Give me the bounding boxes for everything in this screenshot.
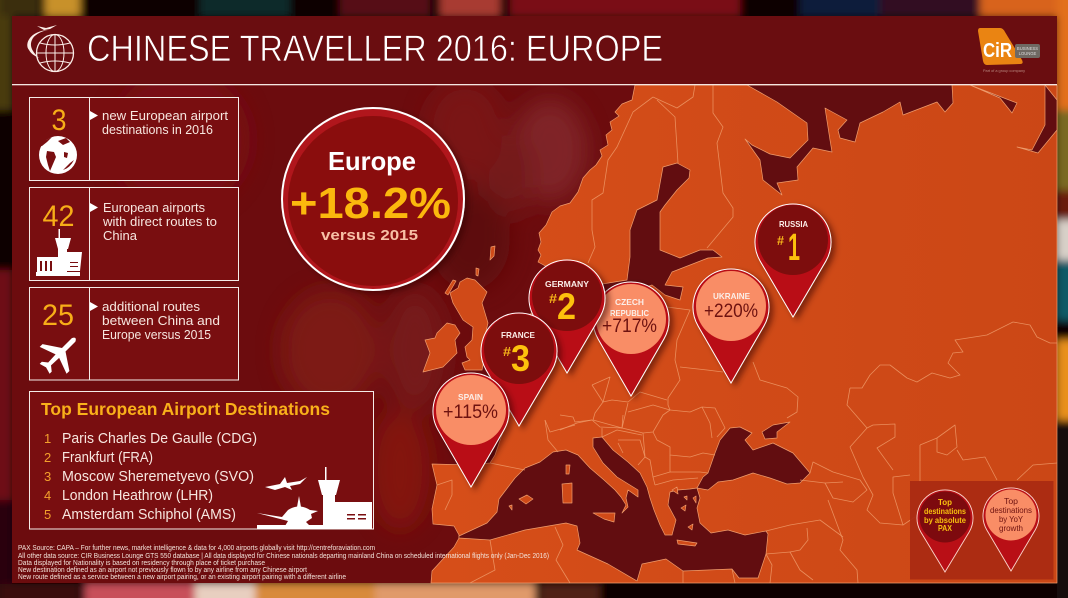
Barents and White Sea (745, 85, 953, 195)
pin: France #3: # (503, 344, 512, 359)
icon: airplane (31, 325, 89, 382)
pin: Ukraine +220%: UKRAINE (713, 291, 750, 301)
stat panel: airports with direct routes: 42 (42, 200, 74, 233)
Europe headline circle: Europe (328, 146, 416, 176)
legend pin: YoY growth: growth (999, 524, 1023, 533)
CIR logo: Part of a group company (983, 68, 1025, 73)
Sardinia and Corsica (562, 465, 572, 503)
legend pin: absolute PAX: destinations (924, 507, 966, 516)
CIR logo (978, 28, 1040, 73)
Country borders (437, 85, 1057, 583)
icon: control tower (36, 229, 82, 276)
pin: Spain +115% (433, 373, 509, 487)
Mediterranean Sea (459, 437, 768, 581)
pin: Czech Republic +717%: +717% (602, 316, 657, 337)
stat panel: new destinations: new European airport (102, 108, 228, 123)
legend pin: YoY growth (983, 488, 1039, 571)
stat panel: airports with direct routes: China (103, 228, 138, 243)
pin: Russia #1: RUSSIA (779, 219, 808, 229)
stat panel: new destinations: 3 (52, 104, 66, 137)
blurred lantern glow inside panel (110, 70, 588, 530)
pin: Spain +115%: +115% (443, 402, 498, 423)
ranked airport list (44, 431, 257, 523)
pin: Russia #1: # (777, 233, 785, 248)
Baltic Sea (596, 163, 722, 300)
pin: Czech Republic +717%: CZECH (615, 297, 644, 307)
icon: globe (39, 136, 77, 174)
source footnotes: New route defined as a service between a new airport pairing, or an existing airport pairing with a different airline (18, 574, 346, 581)
pin: Ukraine +220%: +220% (704, 301, 758, 322)
Kara Sea (970, 85, 1017, 113)
header band (12, 16, 1057, 85)
Ireland (423, 323, 460, 372)
pin: Germany #2 (529, 260, 605, 373)
pin: France #3: 3 (511, 338, 530, 379)
ranked airport list: 5 (44, 507, 51, 522)
pin: Spain +115%: SPAIN (458, 392, 483, 402)
stat panel: additional routes (30, 288, 238, 382)
stat panel: additional routes: between China and (102, 313, 220, 328)
ranked airport list: Amsterdam Schiphol (AMS) (62, 507, 236, 523)
Black Sea (697, 427, 810, 490)
stat panel: additional routes: additional routes (102, 299, 201, 314)
pin: France #3: FRANCE (501, 330, 535, 340)
pin: Czech Republic +717%: REPUBLIC (610, 308, 649, 318)
Aegean islands (672, 487, 696, 530)
ranked airport list: 1 (44, 431, 51, 446)
source footnotes: Data displayed for Nationality is based on residency through place of ticket purchase (18, 560, 265, 567)
panel: top European airport destinations (30, 392, 374, 529)
ranked airport list: 4 (44, 488, 51, 503)
Faroe islands (490, 246, 495, 260)
legend panel (910, 481, 1054, 580)
ranked airport list: 3 (44, 469, 51, 484)
source footnotes: PAX Source: CAPA – For further news, market intelligence & data for 4,000 airports globally visit http://centreforaviation.com (18, 545, 375, 552)
CIR logo: LOUNGE (1019, 51, 1037, 56)
Europe headline circle: versus 2015 (321, 227, 418, 244)
title: CHINESE TRAVELLER 2016: EUROPE (87, 28, 663, 69)
Crete (677, 540, 697, 546)
legend pin: absolute PAX: Top (938, 498, 952, 507)
stat panel: airports with direct routes: European airports (103, 200, 205, 215)
Europe headline circle: +18.2% (290, 179, 451, 228)
stat panel: new destinations (30, 98, 238, 180)
stat panel: airports with direct routes: with direct routes to (102, 214, 217, 229)
Balearic islands (509, 495, 533, 510)
legend pin: absolute PAX: by absolute (924, 516, 967, 525)
pin: Czech Republic +717% (593, 282, 669, 396)
legend pin: absolute PAX: PAX (938, 524, 953, 533)
pin: Germany #2: # (549, 291, 558, 306)
source footnotes: All other data source: CIR Business Lounge GTS 550 database | All data displayed for Chinese nationals departing mainland China on scheduled international flights only (Jan-Dec 2016) (18, 553, 549, 560)
land mass: Europe, Russia, Middle East, North Africa (431, 85, 1057, 583)
pin: Germany #2: GERMANY (545, 279, 589, 289)
Hebrides and Shetland (445, 268, 479, 295)
pin: Russia #1: 1 (788, 227, 800, 269)
Europe headline circle (282, 108, 464, 290)
Arctic inlet (1017, 85, 1057, 153)
icon: airport with planes (257, 467, 372, 529)
stat panel: new destinations: destinations in 2016 (102, 122, 213, 137)
pin: Russia #1 (755, 204, 831, 317)
panel: top European airport destinations: Top European Airport Destinations (41, 399, 330, 419)
legend pin: YoY growth: destinations (990, 506, 1032, 515)
ranked airport list: Frankfurt (FRA) (62, 450, 153, 466)
ranked airport list: 2 (44, 450, 51, 465)
pin: Germany #2: 2 (557, 286, 576, 327)
ranked airport list: Paris Charles De Gaulle (CDG) (62, 431, 257, 447)
map of Europe (423, 85, 1057, 583)
Great Britain (450, 278, 488, 370)
stat panel: additional routes: 25 (42, 299, 74, 332)
header globe and plane icon (27, 25, 74, 72)
source footnotes: New destination defined as an airport not previously flown to by any airline from any Chinese airport (18, 567, 307, 574)
source footnotes (18, 545, 549, 581)
Sicily (593, 513, 615, 522)
pin: Ukraine +220% (693, 269, 769, 383)
ranked airport list: Moscow Sheremetyevo (SVO) (62, 469, 254, 485)
legend pin: YoY growth: by YoY (999, 515, 1024, 524)
legend pin: absolute PAX (917, 490, 973, 572)
stat panel: additional routes: Europe versus 2015 (102, 327, 211, 342)
Sea of Azov (762, 422, 790, 439)
ranked airport list: London Heathrow (LHR) (62, 488, 213, 504)
pin: France #3 (481, 313, 557, 426)
legend pin: YoY growth: Top (1004, 497, 1019, 506)
CIR logo: BUSINESS (1017, 46, 1038, 51)
stat panel: airports with direct routes (30, 188, 238, 280)
CIR logo: CiR (983, 40, 1012, 62)
